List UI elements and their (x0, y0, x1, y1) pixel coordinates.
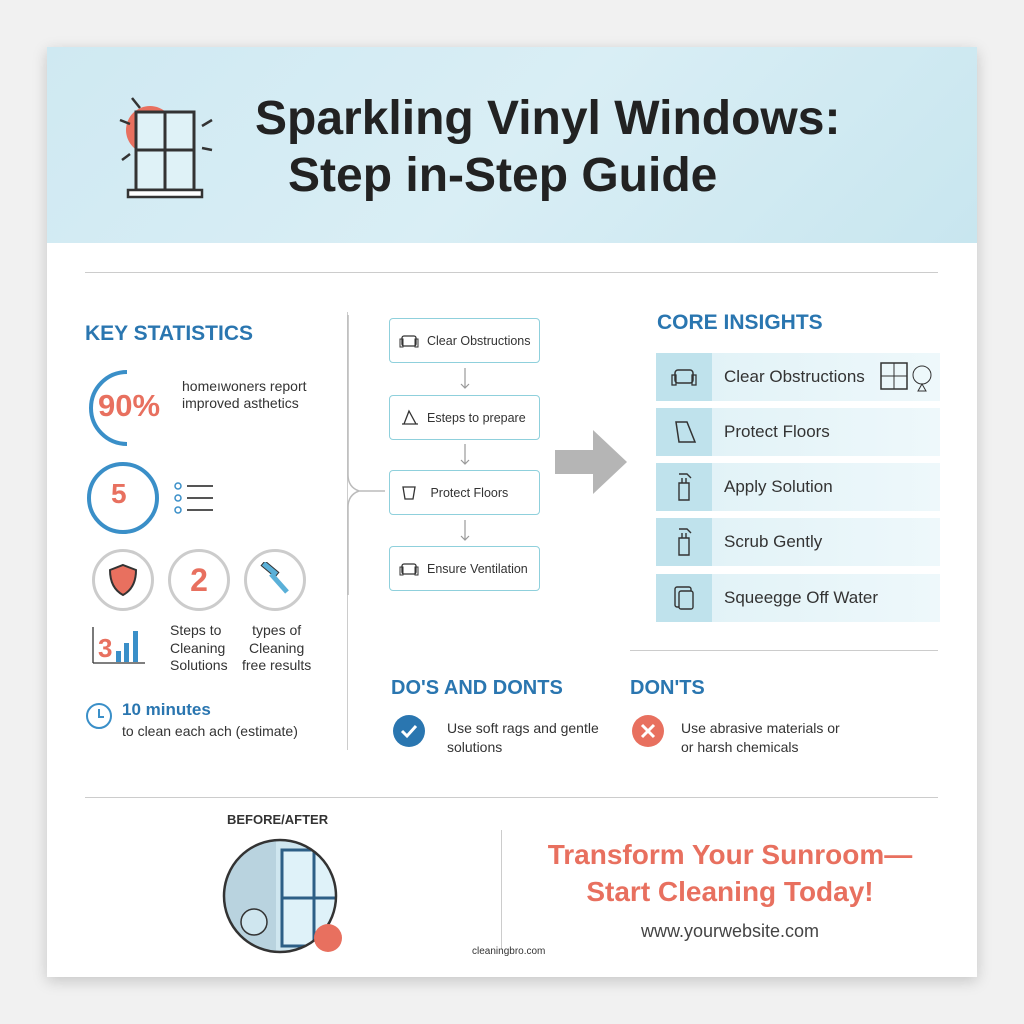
stat 5: 5 (111, 478, 127, 509)
insight rows (656, 353, 940, 622)
panel: dos: solutions (447, 739, 502, 755)
footer brand: cleaningbro.com (472, 946, 545, 957)
flow step 2: Esteps to prepare (427, 410, 526, 424)
title: Step in-Step Guide (288, 149, 717, 202)
flow step 1: Clear Obstructions (427, 334, 531, 348)
panel: donts: or harsh chemicals (681, 739, 798, 755)
row: clear obstructions (656, 353, 940, 401)
row: protect floors: Protect Floors (724, 422, 830, 441)
header band (47, 47, 977, 243)
panel: key statistics: free results (242, 657, 311, 673)
stat 90%: 90% (98, 388, 160, 423)
bracket (348, 315, 385, 595)
stat 90%: homeıwoners report (182, 378, 307, 394)
panel: dos (391, 677, 599, 755)
row: squeegee (656, 574, 940, 622)
row: protect floors (656, 408, 940, 456)
stat 90% (89, 370, 307, 446)
panel: dos: DO'S AND DONTS (391, 677, 563, 699)
icon circles: 2 (190, 562, 208, 598)
flow chart (348, 315, 385, 595)
heading: core insights: CORE INSIGHTS (657, 311, 823, 334)
row: apply solution (656, 463, 940, 511)
title: Sparkling Vinyl Windows: (255, 92, 840, 145)
panel: before/after: BEFORE/AFTER (227, 812, 328, 827)
call to action: Transform Your Sunroom— (548, 839, 912, 870)
stat labels: Steps to (170, 622, 221, 638)
stat labels (170, 622, 228, 673)
stat 5 (87, 462, 213, 534)
call to action: Start Cleaning Today! (586, 876, 874, 907)
flow step 2 (389, 395, 540, 440)
icon circles (92, 549, 306, 611)
call to action (548, 839, 912, 907)
stat labels: Cleaning (170, 640, 225, 656)
row: apply solution: Apply Solution (724, 477, 833, 496)
arrow: big gray (555, 430, 627, 494)
flow step 1 (389, 318, 540, 363)
row: scrub gently: Scrub Gently (724, 532, 822, 551)
panel: dos: Use soft rags and gentle (447, 720, 599, 736)
row: squeegee: Squeeɡge Off Water (724, 588, 878, 607)
panel: key statistics: Cleaning (249, 640, 304, 656)
flow step 4 (389, 546, 540, 591)
flow arrows (460, 368, 470, 541)
stat 10 minutes: to clean each ach (estimate) (122, 723, 298, 739)
chart icon 3: 3 (98, 633, 112, 663)
flow step 3: Protect Floors (430, 486, 508, 500)
stat 10 minutes: 10 minutes (122, 700, 211, 719)
stat labels: Solutions (170, 657, 228, 673)
flow step 3 (389, 470, 540, 515)
panel: key statistics: types of (252, 622, 301, 638)
heading: key statistics: KEY STATISTICS (85, 322, 253, 345)
stat 10 minutes (86, 700, 298, 739)
icon: window with sun (120, 97, 213, 198)
panel: donts: Use abrasive materials or (681, 720, 840, 736)
chart icon 3 (92, 627, 145, 664)
flow step 4: Ensure Ventilation (427, 562, 528, 576)
panel: before/after (222, 812, 342, 954)
stat 90%: improved asthetics (182, 395, 299, 411)
website: www.yourwebsite.com (641, 921, 819, 941)
row: scrub gently (656, 518, 940, 566)
row: clear obstructions: Clear Obstructions (724, 367, 865, 386)
panel: donts: DON'TS (630, 677, 705, 699)
panel: donts (630, 677, 840, 755)
title (255, 92, 840, 202)
panel: key statistics (85, 322, 311, 739)
